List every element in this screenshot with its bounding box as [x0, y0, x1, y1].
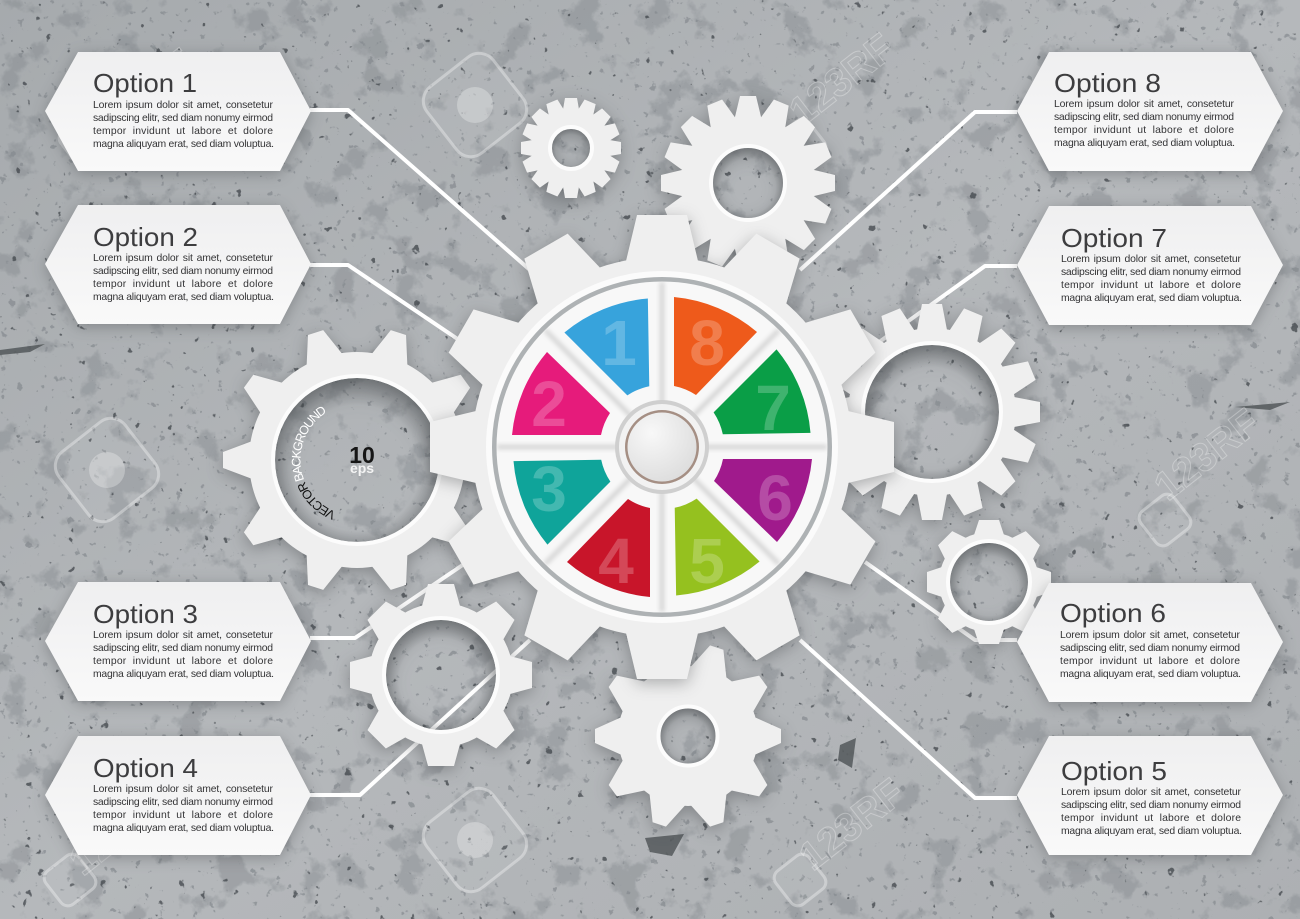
segment numbers: 1	[601, 307, 637, 379]
panel: option 5: Lorem ipsum dolor sit amet, consetetur	[1061, 787, 1242, 798]
panel: option 6: Option 6	[1060, 598, 1166, 628]
panel: option 4: magna aliquyam erat, sed diam voluptua.	[93, 823, 274, 834]
segment numbers: 3	[531, 453, 567, 525]
panel: option 3: Lorem ipsum dolor sit amet, consetetur	[93, 630, 274, 641]
panel: option 1: Lorem ipsum dolor sit amet, consetetur	[93, 100, 274, 111]
gear: bottom left	[350, 584, 532, 766]
watermarks: 123RF	[781, 25, 903, 134]
panel: option 8: Lorem ipsum dolor sit amet, consetetur	[1054, 99, 1235, 110]
segment numbers	[531, 307, 793, 597]
segment numbers: 4	[598, 525, 634, 597]
watermarks: 123RF	[81, 40, 203, 149]
segment 5	[632, 492, 760, 620]
gear: right small	[927, 520, 1051, 644]
gear: top small	[521, 98, 621, 198]
panel: option 3: Option 3	[93, 599, 198, 629]
panel: option 1: magna aliquyam erat, sed diam voluptua.	[93, 139, 274, 150]
segment 1	[564, 274, 692, 402]
wheel dividers	[497, 282, 827, 612]
panel: option 2	[45, 205, 311, 324]
panel: option 8: magna aliquyam erat, sed diam voluptua.	[1054, 138, 1235, 149]
panel: option 6: sadipscing elitr, sed diam nonumy eirmod	[1060, 643, 1240, 654]
segment numbers: 8	[689, 307, 725, 379]
panel: option 2: sadipscing elitr, sed diam nonumy eirmod	[93, 266, 273, 277]
panel: option 3: sadipscing elitr, sed diam nonumy eirmod	[93, 643, 273, 654]
panel: option 5	[1017, 736, 1283, 855]
watermarks: 123RF	[61, 775, 183, 884]
panel: option 7: magna aliquyam erat, sed diam voluptua.	[1061, 293, 1242, 304]
segment 4	[567, 499, 650, 597]
gear: right large	[824, 304, 1040, 520]
watermarks: 123RF	[791, 770, 913, 879]
segment 6	[714, 459, 812, 542]
panel: option 4: tempor invidunt ut labore et dolore	[93, 810, 273, 821]
panel: option 8: tempor invidunt ut labore et dolore	[1054, 125, 1234, 136]
panel: option 6: magna aliquyam erat, sed diam voluptua.	[1060, 669, 1241, 680]
panel: option 1: Option 1	[93, 68, 197, 98]
badge: vector background 10 eps: VECTOR BACKGROUND	[292, 406, 333, 520]
panel: option 3: magna aliquyam erat, sed diam voluptua.	[93, 669, 274, 680]
panel: option 5: tempor invidunt ut labore et dolore	[1061, 813, 1241, 824]
badge: vector background 10 eps	[292, 406, 375, 520]
panel: option 7: tempor invidunt ut labore et dolore	[1061, 280, 1241, 291]
panel: option 7: Lorem ipsum dolor sit amet, consetetur	[1061, 254, 1242, 265]
panel: option 6: tempor invidunt ut labore et dolore	[1060, 656, 1240, 667]
panel: option 2: Option 2	[93, 222, 198, 252]
segment 8	[674, 297, 757, 395]
main gear with segmented wheel	[430, 215, 894, 679]
segment numbers: 2	[531, 368, 567, 440]
segment 3	[489, 417, 617, 545]
panel: option 8	[1017, 52, 1283, 171]
gear: top large	[661, 96, 835, 270]
panel: option 4: sadipscing elitr, sed diam nonumy eirmod	[93, 797, 273, 808]
panel: option 4	[45, 736, 311, 855]
connector lines	[310, 110, 1017, 798]
panel: option 7	[1017, 206, 1283, 325]
panel: option 6	[1017, 583, 1283, 702]
watermarks: 123RF	[1146, 400, 1268, 509]
central hub	[615, 400, 709, 494]
panel: option 7: sadipscing elitr, sed diam nonumy eirmod	[1061, 267, 1241, 278]
panel: option 6: Lorem ipsum dolor sit amet, consetetur	[1060, 630, 1241, 641]
gear: left with badge	[223, 326, 491, 594]
panel: option 8: Option 8	[1054, 68, 1161, 98]
panel: option 5: magna aliquyam erat, sed diam voluptua.	[1061, 826, 1242, 837]
panel: option 3: tempor invidunt ut labore et dolore	[93, 656, 273, 667]
segment numbers: 6	[757, 462, 793, 534]
panel: option 3	[45, 582, 311, 701]
panel: option 1: tempor invidunt ut labore et dolore	[93, 126, 273, 137]
panel: option 7: Option 7	[1061, 223, 1167, 253]
panel: option 8: sadipscing elitr, sed diam nonumy eirmod	[1054, 112, 1234, 123]
panel: option 2: tempor invidunt ut labore et dolore	[93, 279, 273, 290]
main gear body	[430, 215, 894, 679]
panel: option 5: Option 5	[1061, 756, 1167, 786]
panel: option 1	[45, 52, 311, 171]
badge: vector background 10 eps: 10	[349, 442, 375, 468]
wheel rings	[486, 271, 838, 623]
panel: option 4: Lorem ipsum dolor sit amet, consetetur	[93, 784, 274, 795]
panel: option 4: Option 4	[93, 753, 198, 783]
segment numbers: 7	[755, 372, 791, 444]
gear: bottom	[595, 641, 781, 831]
badge: vector background 10 eps: eps	[350, 460, 374, 476]
panel: option 2: Lorem ipsum dolor sit amet, consetetur	[93, 253, 274, 264]
segment 7	[707, 349, 835, 477]
segment 2	[512, 352, 610, 435]
panel: option 5: sadipscing elitr, sed diam nonumy eirmod	[1061, 800, 1241, 811]
panel: option 1: sadipscing elitr, sed diam nonumy eirmod	[93, 113, 273, 124]
panel: option 2: magna aliquyam erat, sed diam voluptua.	[93, 292, 274, 303]
segment numbers: 5	[689, 525, 725, 597]
